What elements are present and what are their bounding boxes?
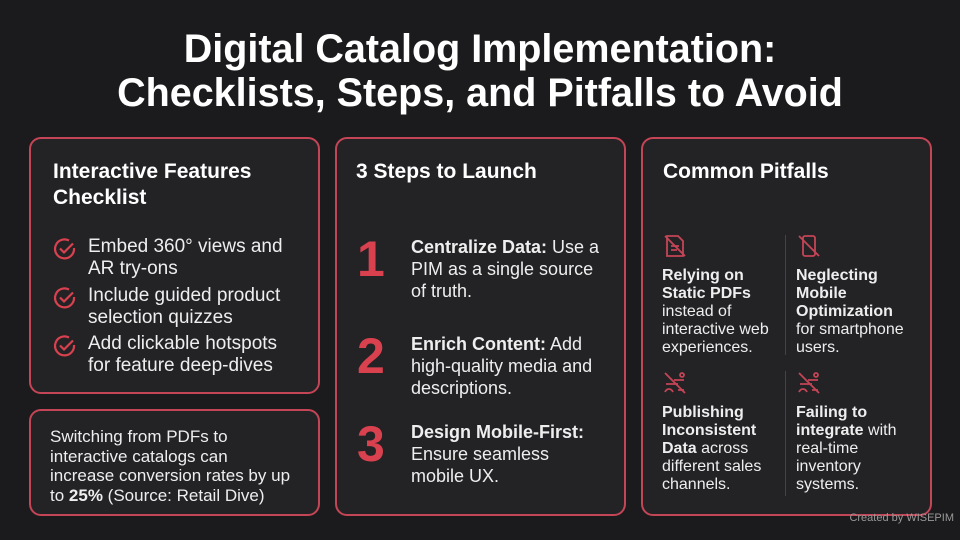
checklist item 1: Embed 360° views and [88,236,283,257]
pitfall: integration: Failing to [796,404,867,421]
panel: interactive features checklist [29,137,320,394]
pitfall: mobile: Mobile [796,285,847,302]
heading [53,160,251,209]
checklist item 3: for feature deep-dives [88,355,273,376]
checklist item 3 [54,333,277,376]
pitfall: static PDFs: interactive web [662,321,769,338]
callout: conversion stat: Switching from PDFs to [50,427,228,446]
pitfall: mobile: Neglecting [796,267,878,284]
pitfall: integration: inventory [796,458,861,475]
pitfall: integration [796,372,896,493]
heading: Interactive Features [53,160,251,183]
step 1: Centralize Data: Use a [411,237,599,257]
checklist item 1: AR try-ons [88,258,178,279]
step 1: of truth. [411,281,472,301]
callout: conversion stat: interactive catalogs can [50,446,228,466]
step 2: descriptions. [411,378,512,398]
pitfall: mobile: Optimization [796,303,893,320]
pitfall: inconsistent data: Publishing [662,404,744,421]
checklist item 2: selection quizzes [88,307,233,328]
callout: conversion stat: increase conversion rates by up [50,466,290,485]
step 1: 1 [357,231,385,287]
pitfall: static PDFs [662,235,769,356]
step 1 [357,231,599,301]
pitfall: inconsistent data [662,372,761,493]
title: Digital Catalog Implementation: [184,27,776,71]
heading: Common Pitfalls [663,160,829,183]
callout: conversion stat: to 25% (Source: Retail Dive) [50,486,264,504]
checklist item 3: Add clickable hotspots [88,333,277,354]
pitfall: inconsistent data: Data across [662,440,748,457]
pitfall: integration: real-time [796,440,858,457]
step 3: 3 [357,416,385,472]
pitfall: inconsistent data: Inconsistent [662,422,756,439]
title: Checklists, Steps, and Pitfalls to Avoid [117,71,843,115]
step 3: mobile UX. [411,466,499,486]
pitfall: inconsistent data: different sales [662,458,761,475]
step 2: Enrich Content: Add [411,334,582,354]
pitfall: mobile: users. [796,339,840,356]
pitfall: integration: systems. [796,476,859,493]
panel: common pitfalls [641,137,932,516]
footer credit: Created by WISEPIM [849,512,954,524]
pitfall: static PDFs: Static PDFs [662,285,751,302]
pitfall: static PDFs: instead of [662,303,731,320]
pitfall: mobile: for smartphone [796,321,904,338]
callout: conversion stat [29,409,320,516]
step 3 [357,416,584,486]
title [117,27,843,115]
step 1: PIM as a single source [411,259,593,279]
heading: Checklist [53,186,146,209]
step 2 [357,328,592,398]
checklist item 1 [54,236,283,279]
heading: 3 Steps to Launch [356,160,537,183]
panel: 3 steps to launch [335,137,626,516]
pitfall: static PDFs: experiences. [662,339,753,356]
pitfall: mobile [796,235,904,356]
pitfall: static PDFs: Relying on [662,267,744,284]
pitfall: inconsistent data: channels. [662,476,730,493]
checklist item 2 [54,285,280,328]
step 2: high-quality media and [411,356,592,376]
step 3: Ensure seamless [411,444,549,464]
step 3: Design Mobile-First: [411,422,584,442]
checklist item 2: Include guided product [88,285,280,306]
pitfall: integration: integrate with [796,422,896,439]
step 2: 2 [357,328,385,384]
